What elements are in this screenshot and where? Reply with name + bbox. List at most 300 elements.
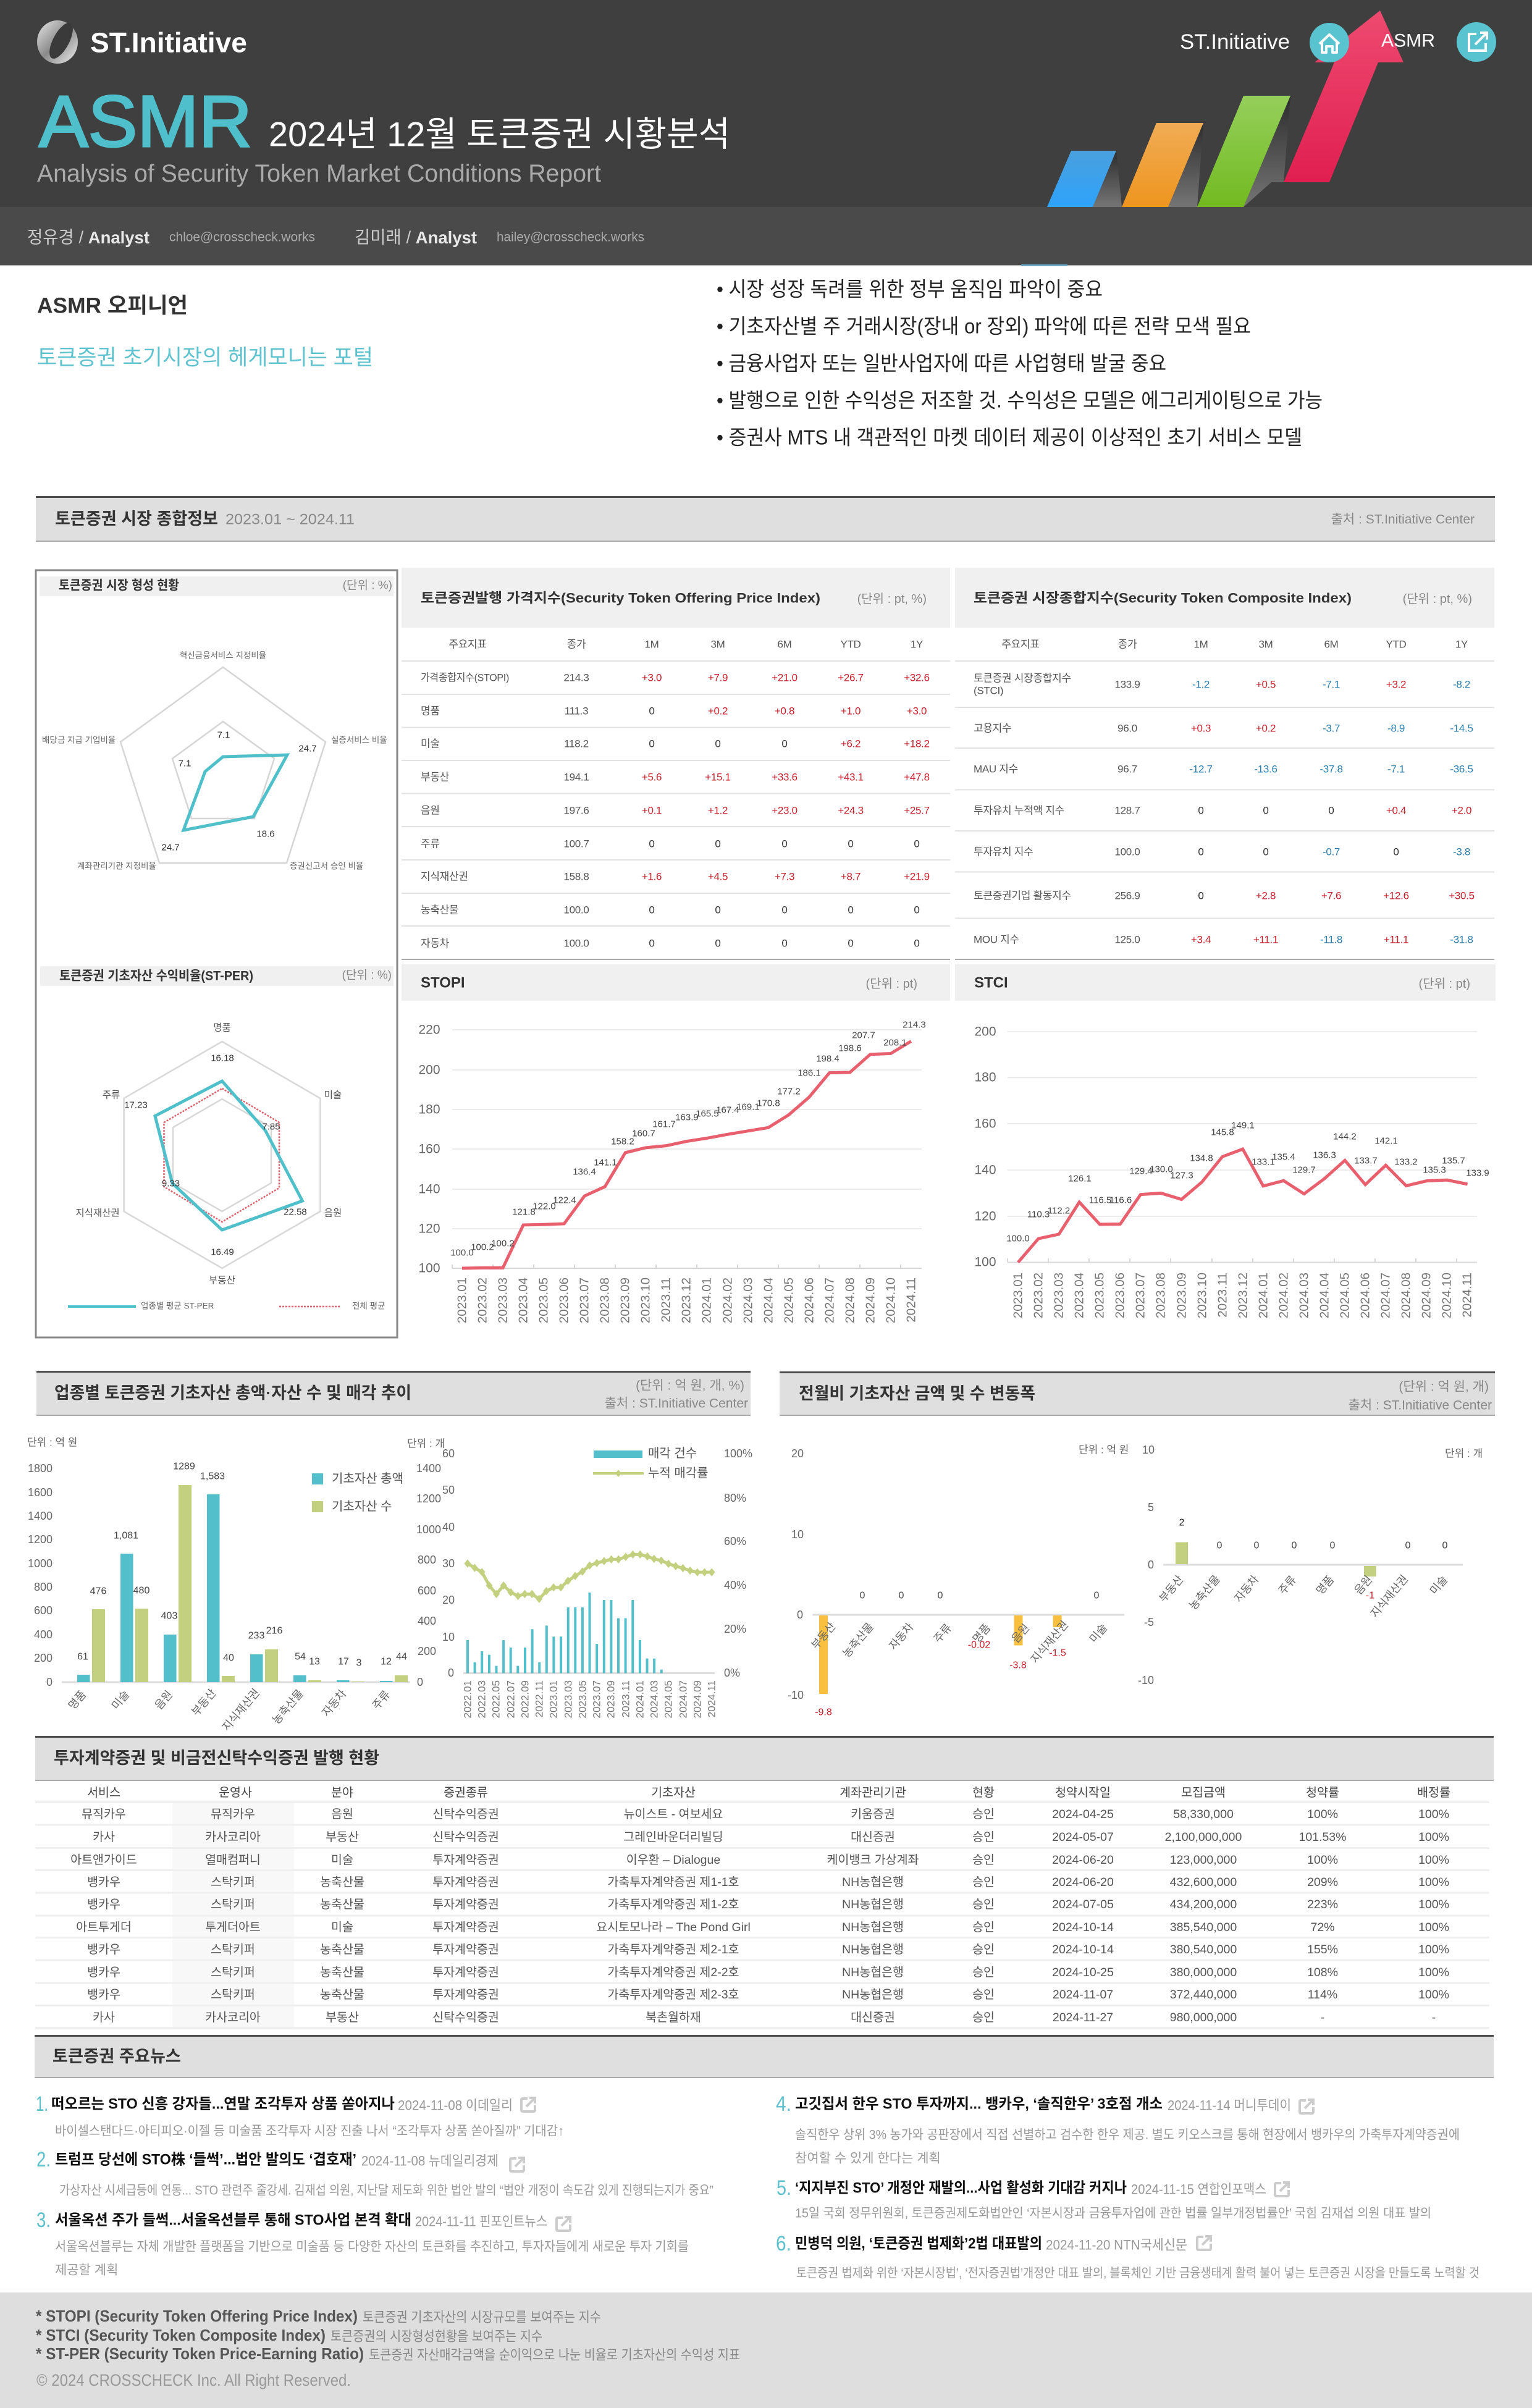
line series: STCI [1018, 1149, 1468, 1263]
data labels: STCI: 116.5 [1089, 1195, 1111, 1206]
category labels: 자동차 [319, 1687, 349, 1719]
radar chart: market formation: 24.7 [161, 843, 180, 852]
x axis: STOPI: 2024.04 [761, 1278, 776, 1323]
data labels: STCI: 144.2 [1333, 1132, 1357, 1142]
row 7: 380,540,000 [1170, 1943, 1237, 1956]
radar chart: ST-PER: 16.49 [211, 1247, 234, 1258]
y axis: -5 [1144, 1616, 1154, 1628]
y axis: count: 0 [448, 1667, 454, 1679]
row 5: 뱅카우 [87, 1898, 120, 1911]
row: luxury: +0.2 [708, 705, 728, 717]
row: company activity: +12.6 [1383, 890, 1409, 902]
x axis: STCI: 2023.04 [1072, 1273, 1086, 1318]
row: investment: 0 [1393, 846, 1399, 857]
x axis: months [462, 1680, 718, 1718]
category labels: 음원 [1009, 1622, 1032, 1645]
row: cumulative investment: 0 [1328, 804, 1334, 817]
row: MOU: -31.8 [1450, 934, 1473, 945]
table: issuance status [35, 1786, 1489, 2028]
row: liquor: 주류 [421, 838, 440, 850]
footnote: STOPI: * STOPI (Security Token Offering Price Index) [36, 2307, 358, 2325]
x axis: STCI: 2024.01 [1256, 1273, 1270, 1318]
row 4: 2024-06-20 [1052, 1875, 1114, 1889]
row: company activity: +30.5 [1449, 890, 1475, 902]
x axis: STOPI: 2024.06 [802, 1278, 817, 1323]
data labels: STCI: 135.3 [1423, 1165, 1446, 1175]
x axis: STOPI: 2024.11 [904, 1278, 918, 1323]
row: employment [974, 723, 1473, 734]
bars: sales count [466, 1593, 663, 1673]
category labels: 미술 [1428, 1573, 1450, 1597]
panel heading: market formation [40, 576, 394, 596]
table heading: STOPI [402, 568, 950, 628]
news item 2: 2. [36, 2148, 51, 2171]
x axis: months: 2022.09 [519, 1680, 531, 1718]
footer [0, 2292, 1532, 2408]
category labels: 지식재산권 [1029, 1619, 1071, 1665]
table heading: STOPI: (단위 : pt, %) [857, 592, 927, 606]
news item 4: 참여할 수 있게 한다는 계획 [795, 2151, 941, 2166]
x axis: STCI: 2024.10 [1439, 1273, 1454, 1318]
section heading: issuance status: 투자계약증권 및 비금전신탁수익증권 발행 현황 [54, 1749, 379, 1767]
y axis: count: 30 [442, 1557, 455, 1570]
x axis: months: 2024.07 [677, 1680, 689, 1718]
nav link: ASMR: ASMR [1381, 31, 1435, 51]
section heading: assets by sector: 출처 : ST.Initiative Center [605, 1396, 748, 1411]
bar value labels [77, 1462, 407, 1668]
category labels: 부동산 [809, 1620, 838, 1651]
row: agriculture: 0 [914, 904, 920, 916]
y axis: count: 20 [442, 1594, 455, 1606]
row 1: 키움증권 [851, 1808, 895, 1821]
row: music [421, 804, 930, 817]
row 7 [87, 1943, 1449, 1956]
row: company activity: +2.8 [1256, 890, 1276, 902]
row: MAU: -7.1 [1387, 764, 1405, 775]
category labels: 농축산물 [270, 1687, 306, 1727]
data labels: STOPI: 122.0 [532, 1201, 556, 1212]
news item 3: 3. [36, 2208, 51, 2232]
legend [312, 1471, 403, 1513]
data labels: STOPI: 186.1 [798, 1067, 821, 1079]
data labels: STCI: 126.1 [1068, 1174, 1092, 1184]
news item 2: 가상자산 시세급등에 연동... STO 관련주 줄강세. 김재섭 의원, 지난달 제도화 위한 법안 발의 “법안 개정이 속도감 있게 진행되는지가 중요” [59, 2183, 713, 2198]
row: agriculture: 0 [715, 904, 721, 916]
row 2: 2024-05-07 [1052, 1830, 1114, 1844]
row 7: 155% [1307, 1943, 1338, 1956]
x axis: STCI [1011, 1273, 1474, 1318]
row 9: 뱅카우 [87, 1988, 120, 2002]
y axis: STOPI: 160 [418, 1142, 440, 1156]
row: agriculture: 0 [649, 904, 655, 916]
news item 4: 4. [776, 2092, 791, 2116]
x axis: STOPI: 2023.11 [659, 1278, 673, 1323]
table: STCI index [955, 568, 1494, 959]
footnote: STOPI [36, 2307, 601, 2325]
row: IP: +7.3 [775, 871, 794, 882]
bar value labels: 13 [309, 1657, 320, 1667]
data labels: STCI: 116.6 [1109, 1195, 1132, 1206]
y axis: secondary left [416, 1462, 441, 1688]
y axis: percent [724, 1447, 752, 1679]
nav link: ASMR [1381, 22, 1496, 62]
row: real estate: +33.6 [772, 771, 798, 783]
row 7: 가축투자계약증권 제2-1호 [607, 1943, 739, 1956]
category labels: 명품 [970, 1622, 993, 1645]
row 3: 아트앤가이드 [70, 1853, 137, 1867]
data labels: STCI: 149.1 [1231, 1121, 1255, 1130]
row 7: 승인 [972, 1943, 995, 1956]
row 6: 미술 [331, 1921, 353, 1934]
row: liquor: 0 [781, 838, 788, 850]
x axis: STOPI: 2023.06 [557, 1278, 571, 1323]
radar chart: market formation: 7.1 [217, 730, 230, 740]
row 4: 432,600,000 [1170, 1875, 1237, 1889]
y axis: secondary left: 200 [418, 1645, 436, 1657]
row: luxury: 명품 [421, 705, 440, 717]
row: investment: 0 [1198, 846, 1204, 857]
radar chart: market formation: 혁신금융서비스 지정비율 [180, 651, 266, 660]
value labels: -1 [1366, 1590, 1374, 1601]
row 5: 투자계약증권 [432, 1898, 499, 1911]
row: investment: 0 [1263, 846, 1269, 857]
row 2: 카사코리아 [205, 1830, 261, 1844]
footnote: STCI: 토큰증권의 시장형성현황을 보여주는 지수 [330, 2329, 542, 2344]
row: liquor: 0 [649, 838, 655, 850]
row: MAU: -36.5 [1450, 764, 1473, 775]
row 8: 2024-10-25 [1052, 1966, 1114, 1979]
row: cumulative investment [974, 804, 1471, 817]
table column headers: 종가 [567, 639, 586, 650]
row: liquor: 0 [848, 838, 854, 850]
data labels: STCI: 135.4 [1272, 1151, 1295, 1163]
row: employment: 96.0 [1117, 723, 1137, 734]
row: art [421, 738, 930, 750]
y axis: STOPI: 200 [418, 1063, 440, 1077]
data labels: STCI: 136.3 [1313, 1150, 1336, 1160]
bar chart: monthly change in value [788, 1444, 1129, 1717]
y axis: value [28, 1462, 53, 1688]
x axis: months: 2024.11 [705, 1680, 718, 1717]
row: cars: 0 [781, 938, 788, 949]
table heading: STCI: 토큰증권 시장종합지수(Security Token Composite Index) [974, 591, 1352, 605]
x axis: months: 2024.09 [692, 1680, 703, 1718]
y axis: percent: 0% [724, 1667, 740, 1679]
radar legend [68, 1301, 385, 1311]
data labels: STOPI: 198.4 [816, 1054, 840, 1064]
row: MOU: 125.0 [1114, 934, 1140, 945]
row 1: 2024-04-25 [1052, 1808, 1114, 1821]
y axis: 10 [791, 1528, 804, 1541]
footnote: STCI [36, 2326, 542, 2344]
news item 2: 2024-11-08 뉴데일리경제 [361, 2153, 499, 2168]
value labels: 0 [1292, 1541, 1297, 1551]
value labels [1179, 1517, 1448, 1601]
bar value labels: 54 [295, 1652, 306, 1662]
row 6: 385,540,000 [1170, 1921, 1237, 1934]
x axis: months: 2023.03 [562, 1680, 574, 1718]
x axis: STCI: 2023.08 [1154, 1273, 1168, 1318]
row 6 [76, 1921, 1449, 1934]
x axis: STOPI: 2023.10 [639, 1278, 652, 1323]
x axis: STOPI [455, 1278, 918, 1323]
news item 3: 서울옥션 주가 들썩...서울옥션블루 통해 STO사업 본격 확대 [55, 2212, 411, 2229]
table column headers: 3M [710, 639, 725, 650]
row 8: 가축투자계약증권 제2-2호 [607, 1966, 739, 1979]
row: real estate: +47.8 [904, 771, 930, 783]
row 10 [93, 2011, 1436, 2024]
row 8: 농축산물 [320, 1966, 364, 1979]
table column headers: 서비스 [87, 1786, 120, 1800]
y axis: value: 800 [34, 1581, 53, 1593]
row: real estate: +43.1 [838, 771, 864, 783]
y axis: STOPI: 220 [418, 1023, 440, 1037]
news item 2: 트럼프 당선에 STO株 ‘들썩’...법안 발의도 ‘겹호재’ [55, 2151, 356, 2168]
data labels: STCI: 135.7 [1442, 1155, 1465, 1166]
x axis: months: 2022.05 [490, 1680, 502, 1718]
row: cars: 100.0 [563, 938, 589, 949]
bar value labels: 403 [161, 1611, 177, 1621]
y axis [788, 1447, 804, 1701]
x axis: STOPI: 2023.01 [455, 1278, 469, 1323]
news item 5: 5. [777, 2176, 791, 2200]
row: investment: -3.8 [1453, 846, 1470, 857]
radar chart: market formation: 24.7 [298, 744, 317, 754]
row: STCI [974, 672, 1470, 697]
data labels: STCI: 127.3 [1170, 1170, 1193, 1181]
table column headers: 계좌관리기관 [840, 1786, 906, 1800]
row: MAU: 96.7 [1117, 764, 1137, 775]
category labels: 부동산 [1156, 1573, 1186, 1604]
row: music: +24.3 [838, 804, 864, 817]
row 7: 2024-10-14 [1052, 1943, 1114, 1956]
data labels: STOPI: 100.0 [450, 1248, 474, 1258]
radar chart: ST-PER: 명품 [213, 1022, 231, 1033]
row 10: 카사코리아 [205, 2011, 261, 2024]
section heading: assets by sector: 업종별 토큰증권 기초자산 총액·자산 수 및 매각 추이 [54, 1384, 411, 1402]
row: STCI: -1.2 [1192, 678, 1210, 691]
row: cars [421, 938, 920, 949]
news item 6: 6. [776, 2232, 791, 2255]
table column headers: 1M [644, 639, 659, 650]
title: report name: 2024년 12월 토큰증권 시황분석 [269, 115, 730, 153]
row: music: 197.6 [563, 804, 589, 817]
row 1: 뉴이스트 - 여보세요 [624, 1808, 723, 1821]
data labels: STOPI: 198.6 [838, 1043, 862, 1054]
x axis: STCI: 2024.04 [1317, 1273, 1332, 1318]
row 6: NH농협은행 [842, 1921, 904, 1934]
row: luxury: 0 [649, 705, 655, 717]
row: art: 118.2 [564, 738, 589, 750]
combo chart: sales count and cumulative rate: 단위 : 개 [407, 1438, 445, 1449]
y axis: value: 1400 [28, 1510, 53, 1522]
panel heading: market formation: 토큰증권 시장 형성 현황 [59, 578, 179, 593]
legend: 기초자산 수 [332, 1499, 392, 1513]
x axis: STOPI: 2023.02 [476, 1278, 489, 1323]
table column headers: 청약시작일 [1055, 1786, 1111, 1800]
x axis: STOPI: 2024.05 [782, 1278, 796, 1323]
row 4: 투자계약증권 [432, 1875, 499, 1889]
data labels: STCI: 133.2 [1394, 1156, 1418, 1168]
analyst 2: hailey@crosscheck.works [497, 230, 644, 245]
row 6: 72% [1310, 1921, 1335, 1934]
y axis: value: 1800 [28, 1462, 53, 1475]
radar chart: ST-PER: 22.58 [284, 1207, 307, 1217]
x axis: STCI: 2024.08 [1399, 1273, 1413, 1318]
table column headers: 1Y [911, 639, 923, 650]
line chart panel: STCI [955, 964, 1496, 1318]
y axis: count: 50 [442, 1484, 455, 1496]
value labels: 0 [1254, 1541, 1260, 1551]
section heading: market overview [36, 496, 1495, 542]
row: STOPI: +3.0 [642, 672, 662, 683]
radar chart: ST-PER: 지식재산권 [75, 1207, 120, 1218]
table column headers: 현황 [972, 1786, 995, 1800]
category labels: 주류 [1276, 1573, 1298, 1597]
category labels: 부동산 [189, 1687, 219, 1718]
legend: 매각 건수 [648, 1446, 697, 1460]
category labels: 자동차 [1232, 1573, 1261, 1604]
x axis: STCI: 2023.11 [1216, 1273, 1229, 1318]
row 3: 투자계약증권 [432, 1853, 499, 1867]
row 7: 투자계약증권 [432, 1943, 499, 1956]
news item 3: 2024-11-11 핀포인트뉴스 [415, 2214, 547, 2229]
value labels: -0.02 [968, 1640, 990, 1651]
row: music: +0.1 [642, 804, 662, 817]
x axis: STCI: 2023.02 [1032, 1273, 1045, 1318]
row 3 [70, 1853, 1449, 1867]
row: art: 0 [781, 738, 788, 750]
row 6: 투게더아트 [205, 1921, 261, 1934]
row 6: 요시토모나라 – The Pond Girl [596, 1921, 751, 1934]
row 1: 신탁수익증권 [432, 1808, 499, 1821]
analyst 1: chloe@crosscheck.works [169, 230, 315, 245]
row 3: 123,000,000 [1170, 1853, 1237, 1867]
bar chart: monthly change in count [1138, 1444, 1483, 1686]
radar chart: market formation: 7.1 [179, 759, 191, 768]
row 8: 투자계약증권 [432, 1966, 499, 1979]
value labels: 0 [899, 1590, 904, 1601]
row: investment [974, 846, 1470, 857]
news item 4: 솔직한우 상위 3% 농가와 공판장에서 직접 선별하고 검수한 한우 제공. 별도 키오스크를 통해 현장에서 뱅카우의 가축투자계약증권에 [795, 2128, 1460, 2142]
y axis: STCI: 120 [974, 1210, 996, 1223]
x axis: STCI: 2023.10 [1195, 1273, 1210, 1318]
row 1 [82, 1808, 1449, 1821]
copyright: © 2024 CROSSCHECK Inc. All Right Reserved. [36, 2371, 351, 2389]
row: company activity: 0 [1198, 890, 1204, 902]
row: employment: 고용지수 [974, 723, 1011, 734]
row: cumulative investment: +0.4 [1386, 804, 1406, 817]
row: IP [421, 871, 930, 882]
row: IP: +4.5 [708, 871, 728, 882]
section heading: issuance status [35, 1736, 1494, 1781]
row 10: 대신증권 [851, 2011, 895, 2024]
row: MAU: -12.7 [1189, 764, 1213, 775]
data labels: STCI: 134.8 [1190, 1153, 1213, 1164]
row 10: 부동산 [326, 2011, 359, 2024]
table column headers: 6M [1324, 639, 1339, 650]
row: MAU: -13.6 [1254, 764, 1277, 775]
row: STOPI: +32.6 [904, 672, 930, 683]
row 2: 100% [1418, 1830, 1449, 1844]
y axis: percent: 40% [724, 1579, 746, 1591]
y axis: value: 400 [34, 1628, 53, 1641]
x axis: STOPI: 2024.02 [720, 1278, 735, 1323]
category labels: 주류 [370, 1688, 392, 1712]
radar chart: ST-PER: 9.33 [162, 1179, 180, 1189]
row: luxury [421, 705, 927, 717]
section heading: monthly change: 전월비 기초자산 금액 및 수 변동폭 [799, 1384, 1035, 1403]
y axis: secondary left: 400 [418, 1615, 436, 1627]
row: liquor: 0 [715, 838, 721, 850]
row 5: 223% [1307, 1898, 1338, 1911]
row 2: 부동산 [326, 1830, 359, 1844]
row 5: 농축산물 [320, 1898, 364, 1911]
row: employment: +0.3 [1191, 723, 1211, 734]
line series: cumulative sale rate [468, 1554, 712, 1599]
row 7: 100% [1418, 1943, 1449, 1956]
row 6: 100% [1418, 1921, 1449, 1934]
radar chart: ST-PER: 16.18 [211, 1053, 234, 1064]
y axis: value: 1200 [28, 1533, 53, 1546]
table column headers: 운영사 [219, 1786, 252, 1800]
data labels: STOPI [450, 1019, 926, 1258]
row 3: 승인 [972, 1853, 995, 1867]
category labels [66, 1686, 392, 1733]
table column headers: YTD [1386, 639, 1407, 650]
radar chart: ST-PER: 17.23 [124, 1100, 148, 1111]
row: IP: +21.9 [904, 871, 930, 882]
x axis: STCI: 2024.06 [1358, 1273, 1373, 1318]
chart heading: STOPI: STOPI [421, 975, 465, 991]
line series: STOPI [462, 1042, 911, 1268]
row 2: 카사 [93, 1830, 115, 1844]
data labels: STOPI: 165.5 [696, 1108, 719, 1119]
table heading: STCI: (단위 : pt, %) [1403, 592, 1472, 606]
y axis: secondary left: 0 [417, 1676, 423, 1688]
bar chart: monthly change in value: 단위 : 억 원 [1079, 1444, 1129, 1455]
category labels: 지식재산권 [1368, 1573, 1410, 1620]
row: investment: 투자유치 지수 [974, 846, 1033, 857]
data labels: STCI: 145.8 [1211, 1127, 1234, 1138]
row: company activity: +7.6 [1321, 890, 1341, 902]
x axis: STOPI: 2023.09 [618, 1278, 633, 1323]
data labels: STOPI: 169.1 [736, 1102, 760, 1112]
row 8: 승인 [972, 1966, 995, 1979]
row 4: NH농협은행 [842, 1875, 904, 1889]
row 9: 2024-11-07 [1053, 1988, 1113, 2002]
row 1: 승인 [972, 1808, 995, 1821]
value labels: 0 [1405, 1541, 1411, 1551]
x axis: months: 2022.03 [476, 1680, 488, 1718]
y axis: value: 600 [34, 1604, 53, 1617]
row: liquor: 0 [914, 838, 920, 850]
row: STCI: -7.1 [1323, 678, 1340, 691]
opinion bullet list: • 발행으로 인한 수익성은 저조할 것. 수익성은 모델은 에그리게이팅으로 가능 [717, 389, 1323, 411]
row 2: 대신증권 [851, 1830, 895, 1844]
data labels: STOPI: 141.1 [594, 1158, 617, 1168]
value labels: 2 [1179, 1517, 1185, 1528]
row 3: 미술 [331, 1853, 353, 1867]
news item 6: 2024-11-20 NTN국세신문 [1046, 2238, 1187, 2252]
value labels [815, 1590, 1100, 1717]
news item 5: ‘지지부진 STO’ 개정안 재발의...사업 활성화 기대감 커지나 [795, 2179, 1127, 2197]
row: IP: 지식재산권 [421, 871, 468, 882]
opinion headline: 토큰증권 초기시장의 헤게모니는 포털 [37, 346, 373, 369]
y axis [1138, 1444, 1155, 1686]
row 4: 100% [1418, 1875, 1449, 1889]
row 4: 승인 [972, 1875, 995, 1889]
